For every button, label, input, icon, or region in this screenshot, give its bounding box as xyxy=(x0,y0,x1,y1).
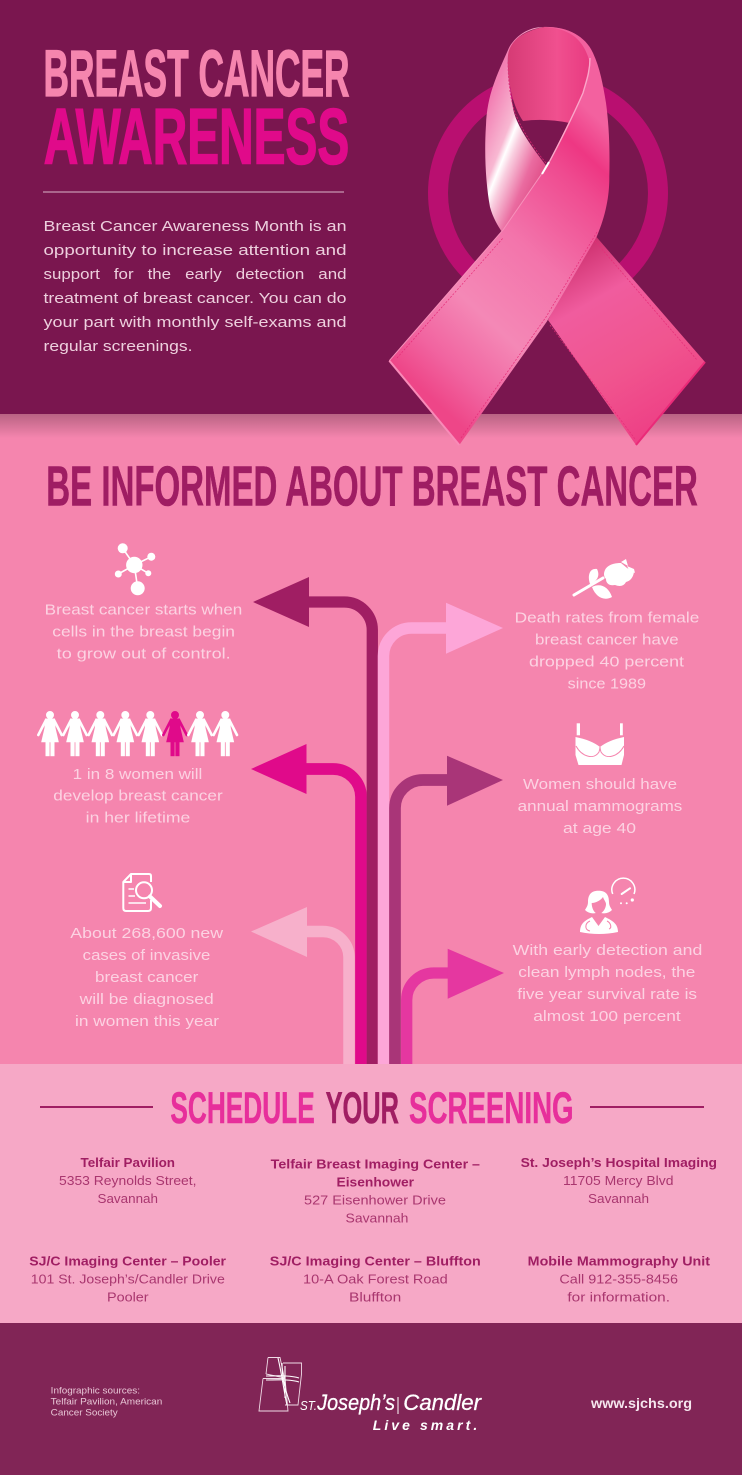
text: breast cancer starts: to grow out of control. xyxy=(57,645,231,662)
arrow: dark left xyxy=(253,577,372,1064)
location: telfair pavilion xyxy=(59,1155,196,1206)
location: bluffton: 10-A Oak Forest Road xyxy=(303,1272,448,1287)
text: annual mammograms: at age 40 xyxy=(563,820,636,837)
location: pooler: Pooler xyxy=(107,1290,149,1305)
text: annual mammograms: Women should have xyxy=(523,776,677,793)
heading: schedule your screening: SCHEDULE xyxy=(170,1084,315,1133)
text: sources: Infographic sources: xyxy=(51,1385,140,1396)
text: 1 in 8 women xyxy=(53,766,223,826)
panel: be informed background xyxy=(0,414,742,1064)
text: death rates: Death rates from female xyxy=(515,610,699,627)
text: early detection xyxy=(513,942,702,1025)
arrow: pale pink right xyxy=(384,603,503,1064)
arrow: purple right xyxy=(395,756,503,1064)
arrow: hot pink right xyxy=(407,949,504,1064)
text: annual mammograms xyxy=(518,776,682,837)
heading: schedule your screening: SCREENING xyxy=(409,1084,574,1133)
location: telfair pavilion: Savannah xyxy=(98,1191,158,1206)
icon: rose xyxy=(574,559,635,599)
text: about 268,600 xyxy=(70,925,223,1030)
title: BREAST CANCER xyxy=(44,36,350,110)
text: annual mammograms: annual mammograms xyxy=(518,798,682,815)
heading: schedule your screening xyxy=(170,1084,574,1133)
intro paragraph xyxy=(44,219,346,355)
intro paragraph: regular screenings. xyxy=(44,339,192,355)
text: about 268,600: in women this year xyxy=(75,1013,219,1030)
icon: ring behind ribbon xyxy=(438,83,658,303)
text: early detection: clean lymph nodes, the xyxy=(518,964,695,981)
text: death rates: breast cancer have xyxy=(535,632,679,649)
location: telfair pavilion: Telfair Pavilion xyxy=(80,1155,175,1170)
logo: st joseph's candler: Joseph’s xyxy=(316,1390,395,1415)
text: website: www.sjchs.org xyxy=(590,1396,692,1411)
location: bluffton xyxy=(270,1254,481,1305)
location: mobile mammography unit xyxy=(528,1254,711,1305)
title xyxy=(44,36,350,180)
location: bluffton: SJ/C Imaging Center – Bluffton xyxy=(270,1254,481,1269)
location: pooler: SJ/C Imaging Center – Pooler xyxy=(29,1254,226,1269)
intro paragraph: support for the early detection and xyxy=(44,267,346,283)
logo: st joseph's candler xyxy=(259,1358,483,1433)
location: telfair breast imaging center: Savannah xyxy=(346,1211,408,1226)
icon: row of eight women xyxy=(38,712,237,756)
text: breast cancer starts: Breast cancer starts when xyxy=(45,601,242,618)
logo: st joseph's candler: Live smart. xyxy=(373,1417,477,1433)
icon: cell xyxy=(115,543,155,595)
location: st joseph's hospital imaging: St. Joseph’s Hospital Imaging xyxy=(521,1155,717,1170)
text: about 268,600: About 268,600 new xyxy=(70,925,223,942)
logo: st joseph's candler: ST. xyxy=(300,1398,317,1413)
text: death rates: since 1989 xyxy=(568,676,646,693)
text: sources: Cancer Society xyxy=(51,1407,118,1418)
location: telfair pavilion: 5353 Reynolds Street, xyxy=(59,1173,196,1188)
text: sources xyxy=(51,1385,162,1418)
text: death rates: dropped 40 percent xyxy=(529,654,685,671)
text: death rates xyxy=(515,610,699,693)
text: about 268,600: will be diagnosed xyxy=(79,991,214,1008)
location: st joseph's hospital imaging xyxy=(521,1155,717,1206)
location: telfair breast imaging center: Telfair Breast Imaging Center – xyxy=(271,1157,480,1172)
location: pooler: 101 St. Joseph’s/Candler Drive xyxy=(31,1272,225,1287)
location: telfair breast imaging center: 527 Eisenhower Drive xyxy=(304,1193,446,1208)
intro paragraph: treatment of breast cancer. You can do xyxy=(44,291,346,307)
text: about 268,600: cases of invasive xyxy=(83,947,210,964)
location: mobile mammography unit: Mobile Mammography Unit xyxy=(528,1254,711,1269)
location: telfair breast imaging center: Eisenhower xyxy=(336,1175,414,1190)
text: early detection: five year survival rate is xyxy=(517,986,697,1003)
arrow: light pink left xyxy=(251,907,349,1064)
panel: footer xyxy=(0,1323,742,1475)
location: bluffton: Bluffton xyxy=(349,1290,401,1305)
panel: header xyxy=(0,0,742,445)
text: breast cancer starts: cells in the breast begin xyxy=(52,623,235,640)
heading: schedule your screening: YOUR xyxy=(326,1084,399,1133)
arrow: magenta left xyxy=(251,744,361,1064)
location: st joseph's hospital imaging: 11705 Mercy Blvd xyxy=(563,1173,674,1188)
icon: doctor with gauge xyxy=(580,878,635,934)
text: breast cancer starts xyxy=(45,601,242,662)
text: early detection: With early detection and xyxy=(513,942,702,959)
location: mobile mammography unit: Call 912-355-8456 xyxy=(559,1272,678,1287)
logo: st joseph's candler: Candler xyxy=(403,1390,483,1415)
text: 1 in 8 women: develop breast cancer xyxy=(53,788,223,805)
intro paragraph: opportunity to increase attention and xyxy=(44,243,346,259)
text: about 268,600: breast cancer xyxy=(95,969,198,986)
panel: schedule your screening xyxy=(0,1064,742,1323)
text: 1 in 8 women: in her lifetime xyxy=(86,809,190,826)
intro paragraph: your part with monthly self-exams and xyxy=(44,315,346,331)
intro paragraph: Breast Cancer Awareness Month is an xyxy=(44,219,346,235)
icon: bra xyxy=(576,723,624,765)
location: pooler xyxy=(29,1254,226,1305)
text: early detection: almost 100 percent xyxy=(533,1008,682,1025)
location: st joseph's hospital imaging: Savannah xyxy=(588,1191,649,1206)
icon: pink ribbon xyxy=(389,27,705,445)
text: sources: Telfair Pavilion, American xyxy=(51,1396,162,1407)
location: mobile mammography unit: for information. xyxy=(567,1290,670,1305)
location: telfair breast imaging center xyxy=(271,1157,480,1226)
icon: document with magnifier xyxy=(123,874,160,911)
text: 1 in 8 women: 1 in 8 women will xyxy=(73,766,202,783)
title: AWARENESS xyxy=(44,92,349,180)
